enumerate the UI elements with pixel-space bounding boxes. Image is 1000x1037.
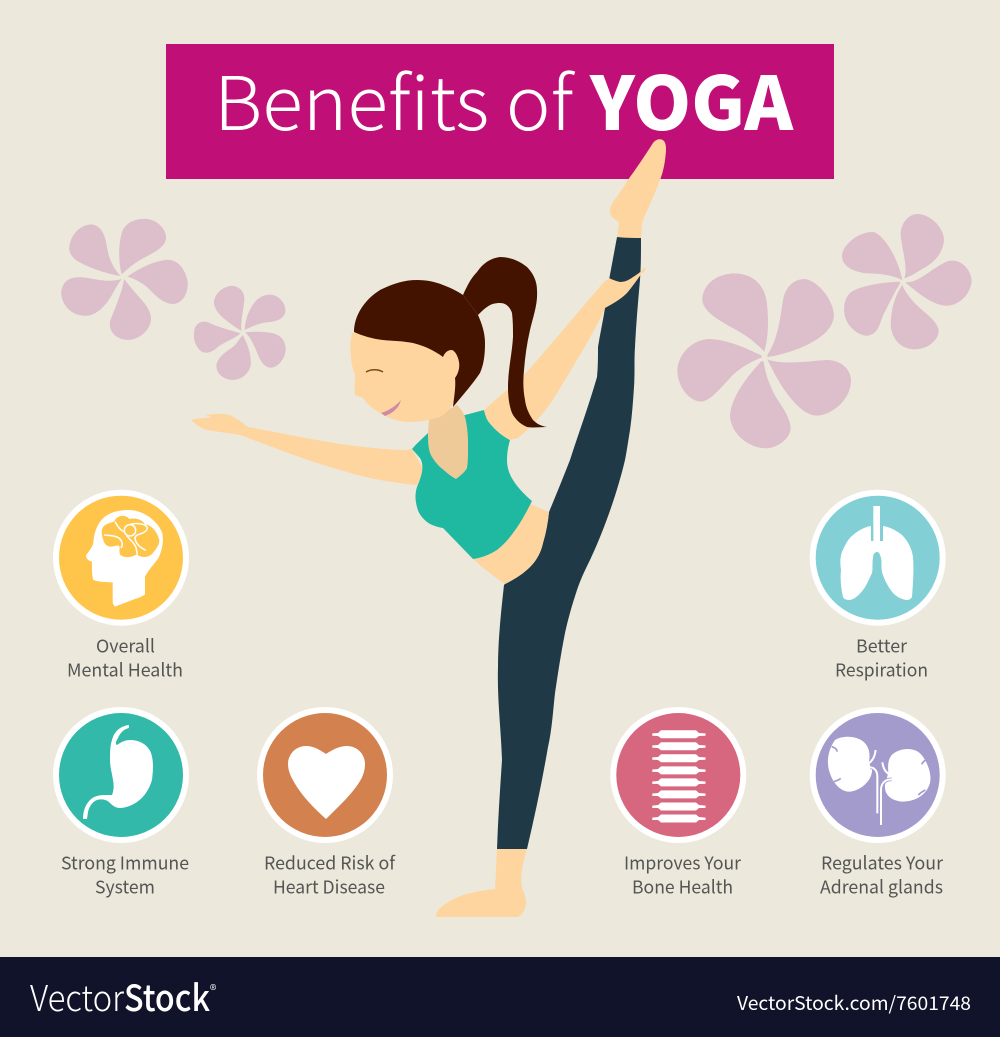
benefit: bone health <box>610 707 746 900</box>
flower: top left large <box>61 219 188 340</box>
icon: head with brain <box>53 490 189 626</box>
label: reduced risk of heart disease: Reduced Risk of <box>264 850 396 876</box>
midriff <box>473 504 549 584</box>
front arm <box>191 414 424 485</box>
title banner: YOGA <box>589 45 794 152</box>
footer logo: ® <box>210 980 216 1000</box>
face <box>350 325 459 422</box>
label: strong immune system: System <box>95 874 155 900</box>
label: better respiration <box>835 632 928 682</box>
label: overall mental health: Mental Health <box>67 656 183 682</box>
icon: stomach <box>53 707 189 843</box>
footer logo: Vector <box>30 970 125 1022</box>
raised foot <box>610 139 666 240</box>
icon: kidneys <box>810 707 946 843</box>
neck <box>428 405 468 479</box>
footer logo <box>30 970 216 1022</box>
flower: right large <box>677 273 851 448</box>
benefit: respiration <box>810 490 946 682</box>
label: improves your bone health <box>624 850 742 900</box>
label: regulates your adrenal glands: Adrenal glands <box>820 874 943 900</box>
footer logo: Stock <box>124 970 210 1022</box>
crop top <box>412 410 532 559</box>
label: strong immune system: Strong Immune <box>61 850 189 876</box>
label: overall mental health <box>67 632 183 682</box>
label: regulates your adrenal glands: Regulates Your <box>821 850 944 876</box>
label: reduced risk of heart disease: Heart Disease <box>273 874 385 900</box>
icon: heart <box>257 707 393 843</box>
flower: top left small <box>194 286 286 380</box>
benefit: adrenal glands <box>810 707 946 900</box>
benefit: immune system <box>53 707 189 900</box>
label: better respiration: Better <box>856 632 908 658</box>
title banner: Benefits of <box>214 45 576 152</box>
label: reduced risk of heart disease <box>264 850 396 900</box>
label: strong immune system <box>61 850 189 900</box>
footer bar <box>0 957 1000 1037</box>
raised arm <box>484 267 645 440</box>
label: improves your bone health: Bone Health <box>632 874 733 900</box>
benefit: heart disease <box>257 707 396 900</box>
hair <box>354 280 485 407</box>
leggings <box>497 237 641 849</box>
label: overall mental health: Overall <box>96 632 155 658</box>
standing foot <box>436 849 527 917</box>
ponytail <box>463 257 547 427</box>
label: better respiration: Respiration <box>835 656 928 682</box>
label: regulates your adrenal glands <box>820 850 944 900</box>
smile <box>381 400 401 416</box>
eye <box>366 370 383 372</box>
yoga figure <box>191 139 666 917</box>
benefit: mental health <box>53 490 189 682</box>
icon: lungs <box>810 490 946 626</box>
label: improves your bone health: Improves Your <box>624 850 742 876</box>
icon: spine <box>610 707 746 843</box>
flower: top right <box>842 214 972 349</box>
title banner <box>166 44 834 179</box>
footer image id: VectorStock.com/7601748 <box>737 989 971 1016</box>
head <box>350 280 485 422</box>
